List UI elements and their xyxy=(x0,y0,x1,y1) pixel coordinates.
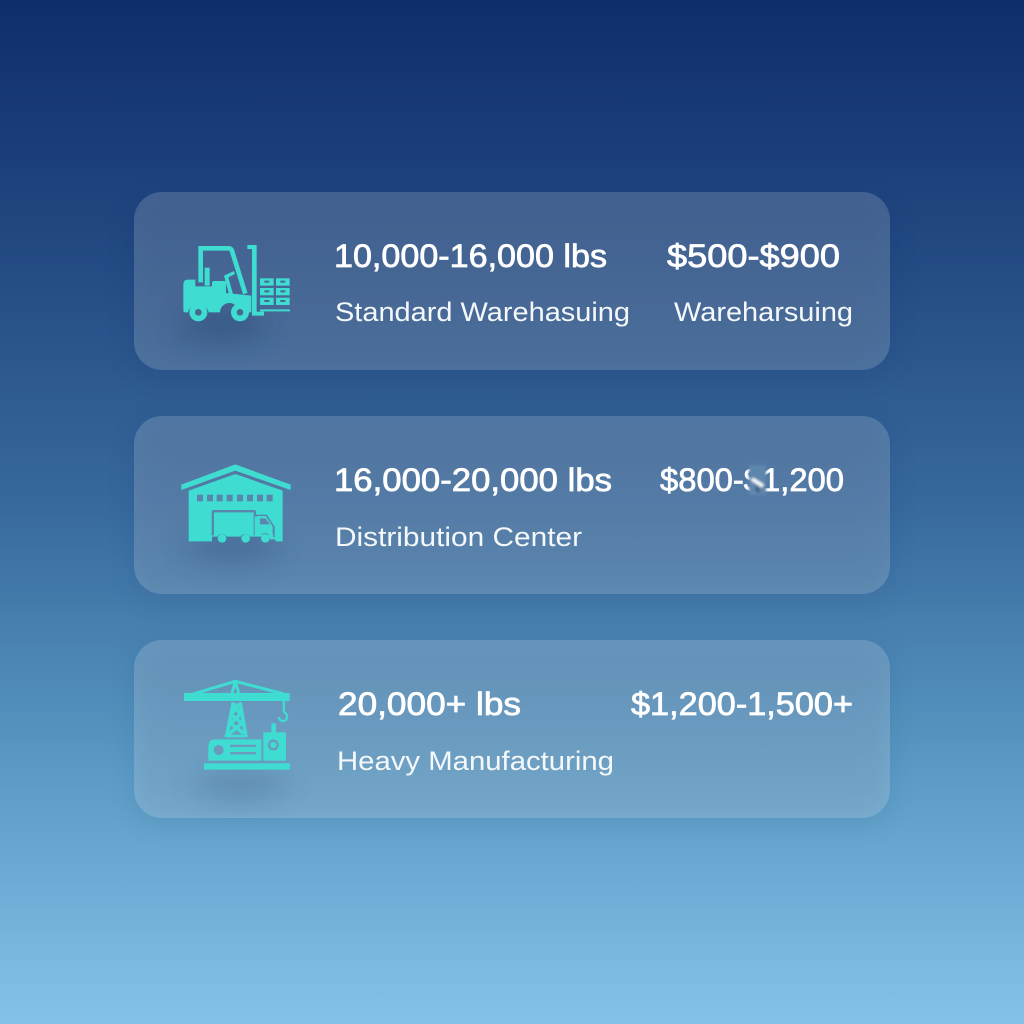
price: $1,200-1,500+: $1,200-1,500+ xyxy=(631,686,853,722)
capacity: 16,000-20,000 lbs: 16,000-20,000 lbs xyxy=(334,462,612,498)
price: $500-$900: $500-$900 xyxy=(667,238,840,274)
panel: distribution center xyxy=(134,416,890,600)
label: Distribution Center: Distribution Center xyxy=(335,522,582,552)
label: Heavy Manufacturing: Heavy Manufacturing xyxy=(337,746,614,776)
price: $800-$1,200: $800-$1,200 xyxy=(660,462,844,498)
panel: standard warehousing xyxy=(134,192,890,376)
panel: heavy manufacturing xyxy=(134,640,890,824)
smudge over dollar sign xyxy=(749,465,766,495)
label: Standard Warehasuing: Standard Warehasuing xyxy=(335,297,630,327)
icon: crane and machinery xyxy=(184,681,290,770)
capacity: 10,000-16,000 lbs: 10,000-16,000 lbs xyxy=(334,238,607,274)
icon: warehouse with truck xyxy=(181,464,291,543)
capacity: 20,000+ lbs: 20,000+ lbs xyxy=(338,686,521,722)
label: Wareharsuing: Wareharsuing xyxy=(674,297,853,327)
icon: forklift xyxy=(183,245,290,321)
